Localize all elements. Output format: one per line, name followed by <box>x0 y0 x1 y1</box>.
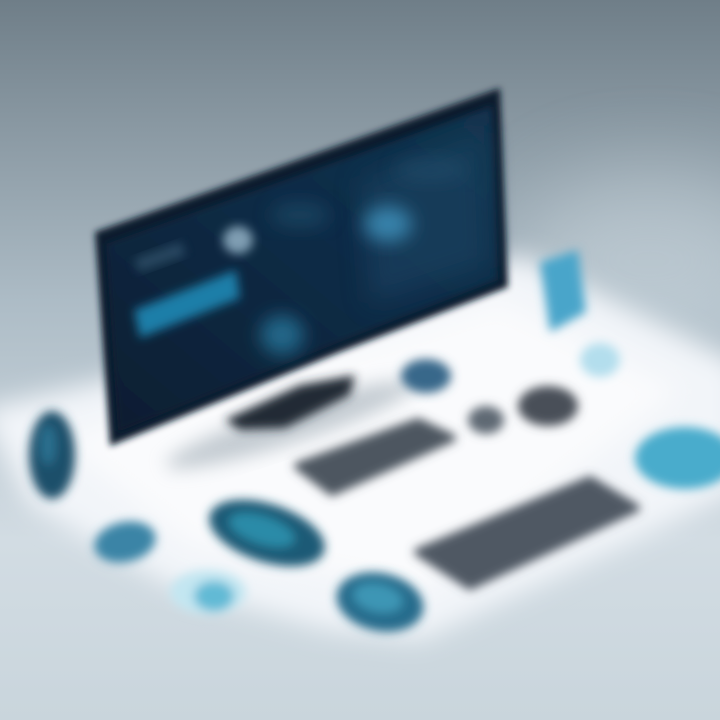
screen panel: lower glow <box>260 315 304 355</box>
device: blue tablet <box>201 487 333 579</box>
keyboard: small <box>298 422 452 492</box>
icon: pale circle right <box>580 343 620 377</box>
device: dark mouse pair <box>468 386 578 434</box>
platform core <box>60 300 680 590</box>
device: small blue oval left <box>91 516 159 568</box>
keyboard: large <box>418 480 636 586</box>
device: right blue speaker <box>540 250 586 332</box>
background glow right <box>520 170 720 350</box>
monitor stand <box>225 375 355 430</box>
screen chart: blue bar <box>134 270 240 338</box>
screen glow top <box>360 130 490 305</box>
monitor screen <box>106 106 498 432</box>
monitor bezel <box>95 88 508 446</box>
screen panel: blue glow <box>364 206 412 242</box>
device: round blue bottom <box>331 564 429 640</box>
monitor <box>95 88 508 446</box>
screen header <box>134 242 186 272</box>
screen highlight: circle <box>223 226 253 254</box>
device: left speaker <box>29 411 75 499</box>
device: small round top <box>401 359 451 393</box>
monitor shadow <box>161 368 419 482</box>
platform <box>0 255 720 640</box>
icon: pale blue circle bottom <box>170 570 246 614</box>
screen lines <box>270 201 330 229</box>
device: right blue pad <box>635 427 720 489</box>
